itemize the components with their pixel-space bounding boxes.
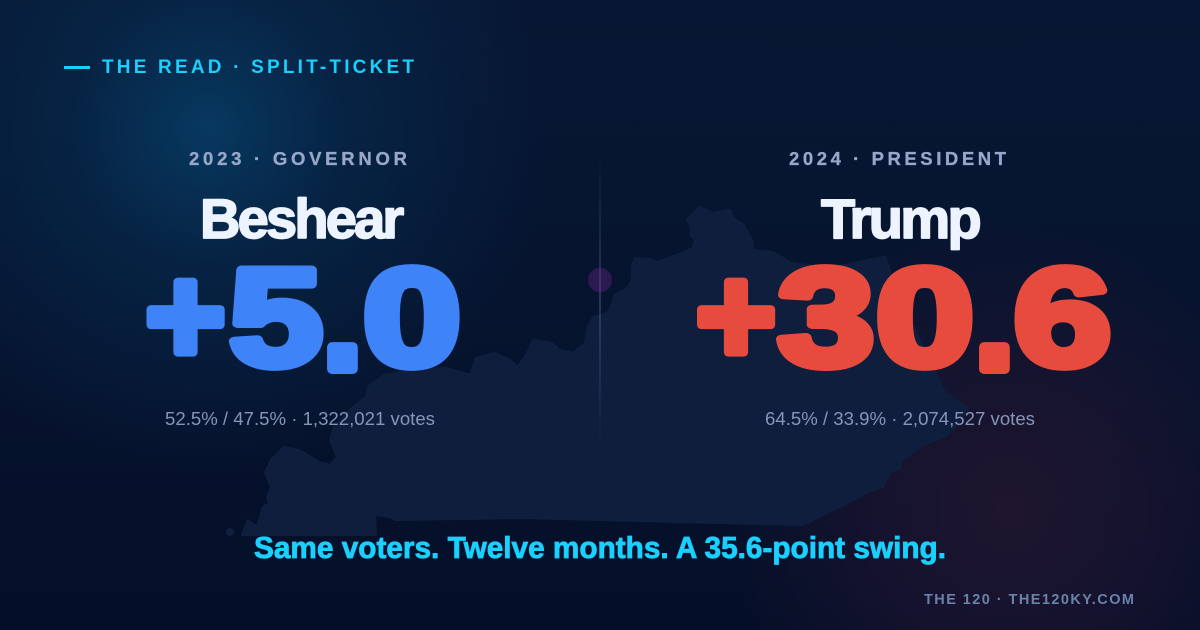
eyebrow — [64, 57, 414, 78]
margin number: 0 — [876, 240, 974, 395]
tagline: Same voters. Twelve months. A 35.6-point swing. — [254, 530, 946, 565]
panel: 2024 president — [696, 148, 1111, 429]
map: Kentucky silhouette — [242, 207, 967, 535]
candidate name: Trump — [821, 187, 980, 250]
margin number — [696, 237, 1111, 401]
margin number: . — [322, 237, 363, 401]
vote stats: 64.5% / 33.9% · 2,074,527 votes — [765, 409, 1035, 429]
margin number: + — [696, 239, 776, 393]
race label: 2023 · GOVERNOR — [189, 148, 407, 169]
margin number: . — [974, 237, 1015, 401]
panel: 2023 governor — [145, 148, 461, 429]
margin number — [145, 237, 461, 401]
footer credit: THE 120 · THE120KY.COM — [924, 592, 1134, 608]
divider — [600, 150, 601, 450]
margin number: 3 — [778, 241, 874, 395]
race label: 2024 · PRESIDENT — [789, 148, 1007, 169]
map: small western island — [226, 528, 234, 536]
eyebrow dash — [64, 66, 90, 69]
vote stats: 52.5% / 47.5% · 1,322,021 votes — [165, 409, 435, 429]
margin number: 5 — [229, 240, 323, 395]
margin number: 6 — [1014, 241, 1111, 395]
margin number: 0 — [363, 240, 461, 395]
marker dot on divider — [588, 268, 612, 292]
eyebrow text: THE READ · SPLIT-TICKET — [102, 57, 414, 78]
candidate name: Beshear — [200, 187, 403, 250]
margin number: + — [145, 239, 226, 393]
